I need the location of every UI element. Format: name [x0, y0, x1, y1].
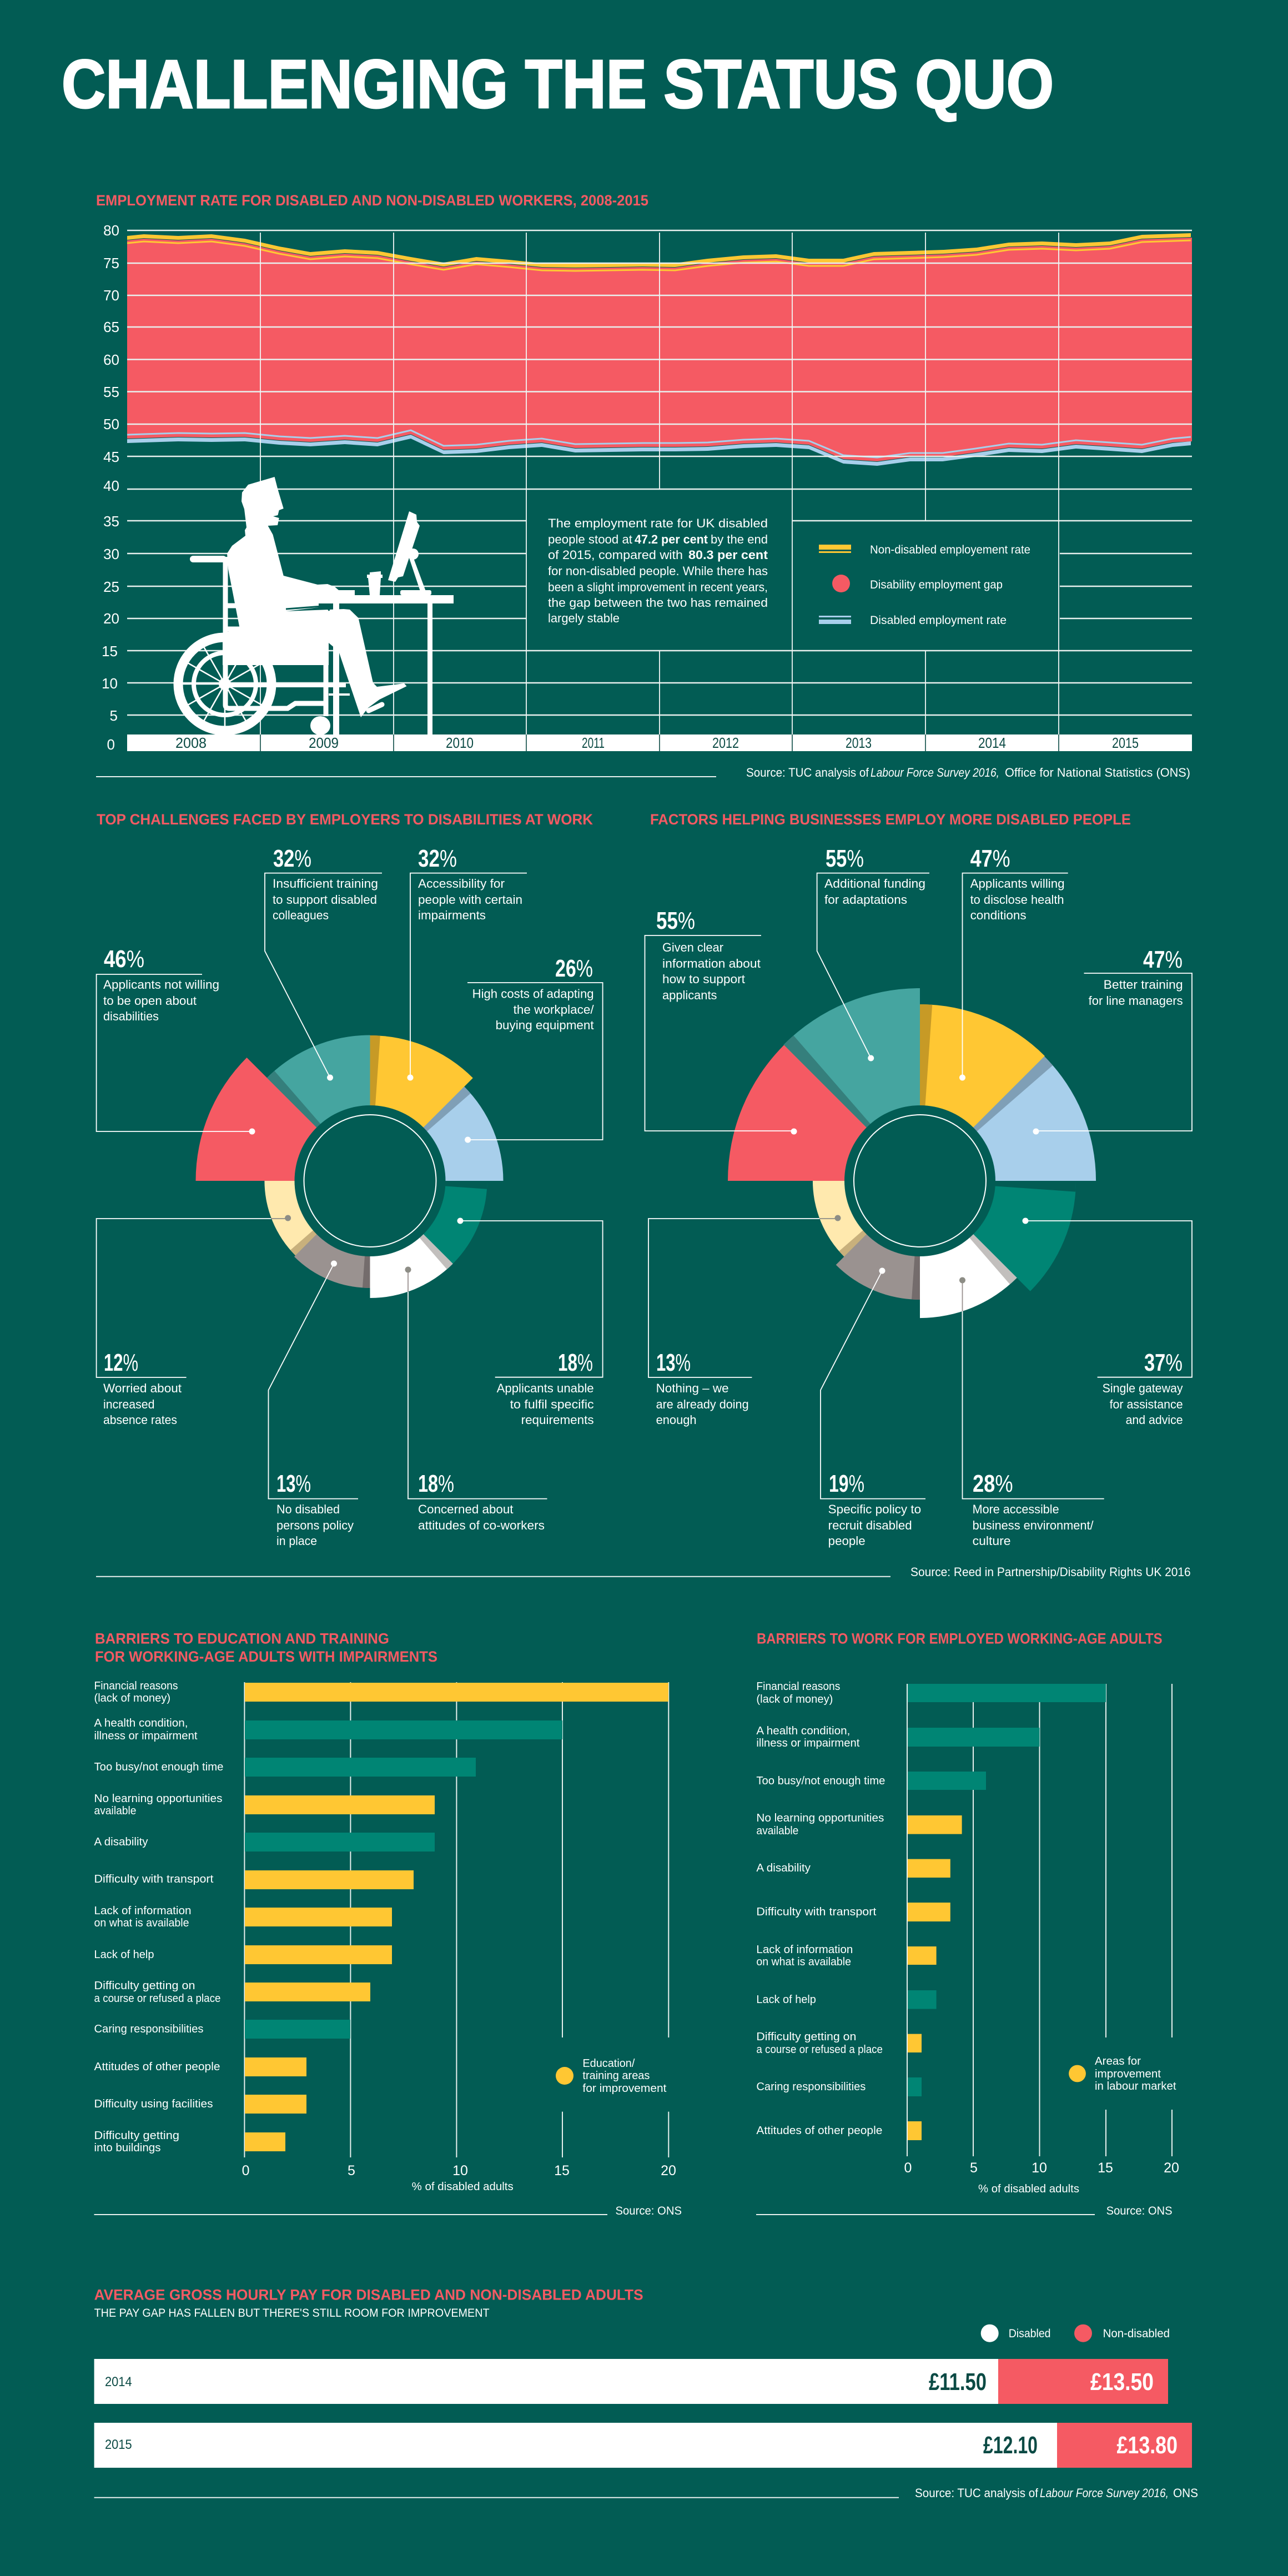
callout: 13% nothing: Nothing – we — [656, 1381, 729, 1395]
source: employment chart — [96, 766, 1190, 779]
source: rose charts: Source: Reed in Partnership/Disability Rights UK 2016 — [910, 1565, 1191, 1579]
bar chart: barriers to education: available — [94, 1805, 137, 1817]
bar chart: barriers to work: A health condition, — [756, 1725, 850, 1737]
callout: 47% better training: for line managers — [1089, 994, 1183, 1008]
wheel — [178, 637, 272, 731]
callout: 18% attitudes of co-workers: attitudes of co-workers — [418, 1518, 545, 1532]
legend: pay: Non-disabled — [1103, 2327, 1170, 2340]
bar chart: barriers to work: on what is available — [756, 1956, 851, 1968]
bar chart: barriers to education — [94, 1680, 676, 2193]
source: work chart: Source: ONS — [1106, 2205, 1173, 2217]
y axis labels: 75 — [103, 255, 119, 271]
bar chart: barriers to work: Caring responsibilities — [756, 2081, 866, 2093]
y axis labels: 5 — [110, 707, 118, 724]
callout: 13% nothing: are already doing — [656, 1397, 749, 1411]
y axis labels: 40 — [103, 477, 119, 494]
legend: employment chart: Disability employment gap — [870, 578, 1003, 591]
callout: 32% insufficient training: 32% — [273, 845, 311, 872]
bar chart: barriers to education: into buildings — [94, 2142, 161, 2154]
y axis labels: 65 — [103, 319, 119, 335]
callout: 13% no disabled policy: persons policy — [276, 1518, 354, 1532]
x axis year bar: 2011 — [582, 734, 605, 751]
bar chart: barriers to education: 20 — [661, 2163, 676, 2178]
bar chart: barriers to work: 15 — [1098, 2160, 1113, 2176]
text block: employment summary: largely stable — [548, 611, 620, 625]
heading: barriers to education — [95, 1631, 437, 1665]
bar chart: barriers to work: 20 — [1164, 2160, 1179, 2176]
heading: barriers to education: BARRIERS TO EDUCATION AND TRAINING — [95, 1631, 389, 1647]
heading: top challenges: TOP CHALLENGES FACED BY EMPLOYERS TO DISABILITIES AT WORK — [97, 811, 593, 828]
callout: 28% more accessible: 28% — [973, 1470, 1013, 1497]
bar chart: barriers to education: 0 — [242, 2163, 250, 2178]
y axis labels: 25 — [103, 578, 119, 595]
callout: 19% specific policy: Specific policy to — [828, 1502, 921, 1516]
callout: 18% applicants unable: Applicants unable — [497, 1381, 594, 1395]
callout: 12% worried about absence: absence rates — [103, 1413, 177, 1427]
callout: 46% applicants not willing: 46% — [104, 945, 144, 973]
source: pay: Labour Force Survey 2016, — [1040, 2486, 1169, 2500]
callout: 26% high costs: buying equipment — [496, 1018, 594, 1032]
callout: 32% insufficient training: to support disabled — [273, 893, 377, 907]
callout: 55% given clear information: Given clear — [662, 940, 723, 954]
y axis labels: 50 — [103, 416, 119, 432]
callout: 32% insufficient training: Insufficient training — [273, 877, 378, 890]
text block: employment summary: for non-disabled people. While there has — [548, 564, 768, 578]
bar: pay 2015: £12.10 — [983, 2432, 1038, 2459]
callout: 55% additional funding — [817, 845, 929, 1061]
bar chart: barriers to education: Caring responsibilities — [94, 2023, 203, 2035]
callout: 19% specific policy: 19% — [829, 1470, 864, 1497]
heading: barriers to education: FOR WORKING-AGE ADULTS WITH IMPAIRMENTS — [95, 1648, 437, 1665]
y axis labels: 0 — [107, 736, 115, 753]
callout: 13% nothing: enough — [656, 1413, 697, 1427]
bar chart: barriers to education: A disability — [94, 1836, 148, 1848]
legend: employment chart: Disabled employment rate — [870, 614, 1007, 627]
callout: 37% single gateway: for assistance — [1110, 1397, 1183, 1411]
callout: 32% accessibility: Accessibility for — [418, 877, 505, 890]
callout: 19% specific policy: recruit disabled — [828, 1518, 912, 1532]
callout: 18% attitudes of co-workers — [405, 1267, 547, 1532]
callout: 12% worried about absence: 12% — [104, 1349, 138, 1376]
bar: pay 2014: £13.50 — [1090, 2368, 1154, 2396]
bar: pay 2014: 2014 — [105, 2374, 132, 2389]
legend: education areas: for improvement — [582, 2082, 667, 2095]
bar chart: barriers to work: Attitudes of other people — [756, 2125, 882, 2137]
y axis labels: 20 — [103, 610, 119, 627]
callout: 18% applicants unable: requirements — [521, 1413, 594, 1427]
callout: 13% no disabled policy: 13% — [276, 1470, 311, 1497]
callout: 46% applicants not willing: to be open about — [103, 994, 197, 1008]
text block: employment summary: been a slight improvement in recent years, — [548, 580, 768, 594]
bar: pay 2014: £11.50 — [929, 2368, 987, 2396]
bar chart: barriers to work: Difficulty with transport — [756, 1906, 877, 1918]
bar chart: barriers to education: A health condition, — [94, 1717, 188, 1729]
callout: 13% no disabled policy: No disabled — [276, 1502, 340, 1516]
x axis year bar: 2012 — [712, 734, 739, 751]
bar chart: barriers to education: Difficulty using facilities — [94, 2098, 213, 2110]
callout: 55% additional funding: 55% — [826, 845, 864, 872]
callout: 47% better training: 47% — [1143, 946, 1183, 973]
bar chart: barriers to work: No learning opportunities — [756, 1812, 884, 1824]
callout: 46% applicants not willing: disabilities — [103, 1009, 159, 1023]
bar chart: barriers to education: Financial reasons — [94, 1680, 178, 1692]
bar chart: barriers to education: Lack of information — [94, 1905, 191, 1917]
legend: education areas: training areas — [582, 2070, 650, 2082]
bar chart: barriers to work: Lack of information — [756, 1944, 853, 1956]
desk — [319, 595, 454, 603]
callout: 28% more accessible — [959, 1277, 1104, 1548]
bar chart: barriers to education: Difficulty with transport — [94, 1873, 214, 1885]
callout: 47% applicants willing: conditions — [970, 908, 1027, 922]
callout: 18% attitudes of co-workers: Concerned about — [418, 1502, 513, 1516]
area chart: employment rates — [127, 230, 1192, 734]
bar chart: barriers to work: a course or refused a place — [756, 2044, 883, 2056]
text block: employment summary — [548, 516, 768, 625]
bar chart: barriers to work: Financial reasons — [756, 1681, 840, 1693]
callout: 37% single gateway — [1023, 1218, 1192, 1427]
legend: education areas — [556, 2057, 667, 2095]
bar chart: barriers to work — [756, 1681, 1179, 2195]
callout: 47% applicants willing: Applicants willing — [970, 877, 1065, 890]
text block: employment summary: people stood at — [548, 532, 632, 546]
callout: 18% applicants unable — [457, 1218, 603, 1427]
bar chart: barriers to work: 10 — [1032, 2160, 1047, 2176]
bar chart: barriers to education: 10 — [452, 2163, 468, 2178]
callout: 18% attitudes of co-workers: 18% — [418, 1470, 454, 1497]
bar chart: barriers to education: on what is available — [94, 1917, 189, 1929]
callout: 26% high costs: 26% — [555, 955, 593, 982]
callout: 13% nothing: 13% — [656, 1349, 691, 1376]
callout: 47% applicants willing — [959, 845, 1068, 1080]
callout: 12% worried about absence — [97, 1215, 291, 1427]
bar chart: barriers to education: No learning opportunities — [94, 1793, 222, 1805]
icon: wheelchair user at desk — [178, 477, 454, 735]
x axis year bar: 2010 — [446, 734, 474, 751]
legend: labour market areas: improvement — [1095, 2068, 1161, 2080]
legend: pay — [981, 2325, 1170, 2342]
callout: 32% insufficient training: colleagues — [273, 908, 329, 922]
x axis year bar: 2008 — [175, 734, 207, 751]
callout: 55% given clear information: 55% — [656, 907, 695, 934]
callout: 46% applicants not willing: Applicants not willing — [103, 978, 219, 992]
callout: 37% single gateway: Single gateway — [1103, 1381, 1183, 1395]
rose chart: factors helping — [728, 948, 1133, 1346]
callout: 46% applicants not willing — [97, 945, 255, 1135]
callout: 55% given clear information: information about — [662, 957, 761, 970]
callout: 37% single gateway: and advice — [1126, 1413, 1183, 1427]
callout: 19% specific policy — [821, 1268, 925, 1548]
bar: pay 2015 — [94, 2423, 1192, 2468]
heading: average gross hourly pay: AVERAGE GROSS HOURLY PAY FOR DISABLED AND NON-DISABLED ADULTS — [94, 2287, 643, 2303]
source: education chart: Source: ONS — [615, 2205, 682, 2217]
title: CHALLENGING THE STATUS QUO — [62, 47, 1054, 123]
person and seat — [223, 477, 454, 717]
heading: average gross hourly pay: THE PAY GAP HAS FALLEN BUT THERE'S STILL ROOM FOR IMPROVEMENT — [94, 2307, 490, 2320]
x axis year bar — [127, 734, 1192, 751]
bar chart: barriers to education: Too busy/not enough time — [94, 1761, 223, 1773]
legend: labour market areas: in labour market — [1095, 2080, 1176, 2092]
bar chart: barriers to education: (lack of money) — [94, 1692, 170, 1704]
y axis labels: 15 — [102, 643, 118, 660]
bar chart: barriers to work: illness or impairment — [756, 1737, 860, 1749]
callout: 55% additional funding: for adaptations — [824, 893, 907, 907]
y axis labels: 70 — [103, 287, 119, 304]
callout: 13% no disabled policy — [269, 1260, 358, 1548]
callout: 47% applicants willing: 47% — [970, 845, 1010, 872]
bar chart: barriers to work: % of disabled adults — [978, 2183, 1079, 2195]
bar chart: barriers to work: A disability — [756, 1862, 811, 1874]
callout: 12% worried about absence: Worried about — [103, 1381, 182, 1395]
source: employment chart: Labour Force Survey 2016, — [871, 766, 999, 779]
callout: 47% applicants willing: to disclose health — [970, 893, 1064, 907]
bar: pay 2014 — [94, 2359, 1168, 2404]
source: employment chart: Source: TUC analysis of — [746, 766, 869, 779]
callout: 13% nothing — [648, 1215, 841, 1427]
bar chart: barriers to education: % of disabled adults — [412, 2181, 514, 2193]
bar chart: barriers to education: 5 — [348, 2163, 355, 2178]
bar chart: barriers to education: illness or impairment — [94, 1730, 198, 1742]
bar chart: barriers to education: 15 — [554, 2163, 570, 2178]
heading: barriers to work: BARRIERS TO WORK FOR EMPLOYED WORKING-AGE ADULTS — [757, 1631, 1163, 1647]
source: pay: ONS — [1173, 2486, 1198, 2500]
callout: 28% more accessible: culture — [973, 1534, 1011, 1548]
heading: employment rate: EMPLOYMENT RATE FOR DISABLED AND NON-DISABLED WORKERS, 2008-2015 — [96, 192, 648, 209]
text block: employment summary: the gap between the two has remained — [548, 596, 768, 610]
y axis labels: 55 — [103, 384, 119, 400]
bar chart: barriers to work: available — [756, 1825, 798, 1837]
y axis labels: 10 — [102, 675, 118, 692]
bar chart: barriers to education: Lack of help — [94, 1949, 154, 1961]
callout: 28% more accessible: More accessible — [973, 1502, 1059, 1516]
callout: 32% accessibility: impairments — [418, 908, 486, 922]
text block: employment summary: The employment rate for UK disabled — [548, 516, 768, 530]
callout: 26% high costs — [465, 955, 603, 1143]
bar chart: barriers to work: Lack of help — [756, 1994, 816, 2006]
bar chart: barriers to work: 5 — [970, 2160, 978, 2176]
bar chart: barriers to work: (lack of money) — [756, 1693, 833, 1705]
text block: employment summary: 47.2 per cent — [635, 532, 708, 546]
text block: employment summary: of 2015, compared with — [548, 548, 683, 562]
callout: 55% given clear information: how to support — [662, 972, 745, 986]
callout: 55% additional funding: Additional funding — [824, 877, 925, 890]
callout: 28% more accessible: business environment/ — [973, 1518, 1094, 1532]
source: pay — [94, 2486, 1198, 2500]
y axis labels: 45 — [103, 449, 119, 465]
callout: 18% applicants unable: 18% — [558, 1349, 593, 1376]
x axis year bar: 2013 — [846, 734, 872, 751]
footrest — [369, 705, 382, 711]
bar chart: barriers to work: Too busy/not enough time — [756, 1775, 885, 1787]
coffee cup — [367, 571, 383, 595]
legend: pay: Disabled — [1009, 2327, 1050, 2340]
text block: employment summary: 80.3 per cent — [688, 548, 768, 562]
callout: 32% accessibility: 32% — [418, 845, 457, 872]
heading: average gross hourly pay — [94, 2287, 643, 2320]
callout: 32% insufficient training — [265, 845, 382, 1080]
bar chart: barriers to education: Difficulty getting — [94, 2130, 179, 2142]
callout: 26% high costs: High costs of adapting — [472, 987, 594, 1000]
source: employment chart: Office for National Statistics (ONS) — [1005, 766, 1190, 779]
text block: employment summary: by the end — [711, 532, 768, 546]
bar chart: barriers to education: Difficulty getting on — [94, 1980, 195, 1992]
rose chart: top challenges — [195, 1005, 531, 1322]
source: pay: Source: TUC analysis of — [915, 2486, 1039, 2500]
y axis labels — [102, 222, 119, 753]
callout: 12% worried about absence: increased — [103, 1397, 154, 1411]
legend: employment chart — [819, 544, 1030, 627]
legend: labour market areas — [1069, 2055, 1176, 2092]
callout: 32% accessibility: people with certain — [418, 893, 522, 907]
monitor — [388, 511, 420, 582]
wheelchair frame — [193, 556, 223, 562]
callout: 55% given clear information: applicants — [662, 988, 717, 1002]
y axis labels: 30 — [103, 546, 119, 562]
callout: 19% specific policy: people — [828, 1534, 866, 1548]
bar chart: barriers to education: a course or refused a place — [94, 1993, 221, 2005]
bar chart: barriers to education: Attitudes of other people — [94, 2061, 220, 2073]
x axis year bar: 2009 — [309, 734, 339, 751]
callout: 47% better training: Better training — [1104, 978, 1183, 992]
y axis labels: 80 — [103, 222, 119, 239]
y axis labels: 60 — [103, 351, 119, 368]
legend: education areas: Education/ — [582, 2057, 635, 2070]
callout: 37% single gateway: 37% — [1144, 1349, 1183, 1376]
callout: 32% accessibility — [407, 845, 527, 1080]
callout: 18% applicants unable: to fulfil specific — [510, 1397, 594, 1411]
x axis year bar: 2015 — [1112, 734, 1139, 751]
y axis labels: 35 — [103, 513, 119, 530]
callout: 47% better training — [1033, 946, 1192, 1135]
legend: labour market areas: Areas for — [1095, 2055, 1141, 2067]
bar chart: barriers to work: 0 — [904, 2160, 912, 2176]
x axis year bar: 2014 — [978, 734, 1006, 751]
heading: factors helping: FACTORS HELPING BUSINESSES EMPLOY MORE DISABLED PEOPLE — [650, 811, 1131, 828]
legend: employment chart: Non-disabled employement rate — [870, 544, 1030, 556]
bar: pay 2015: £13.80 — [1117, 2432, 1178, 2459]
callout: 26% high costs: the workplace/ — [514, 1003, 594, 1017]
bar: pay 2015: 2015 — [105, 2437, 132, 2452]
callout: 13% no disabled policy: in place — [276, 1534, 317, 1548]
bar chart: barriers to work: Difficulty getting on — [756, 2031, 856, 2043]
callout: 55% given clear information — [645, 907, 797, 1135]
